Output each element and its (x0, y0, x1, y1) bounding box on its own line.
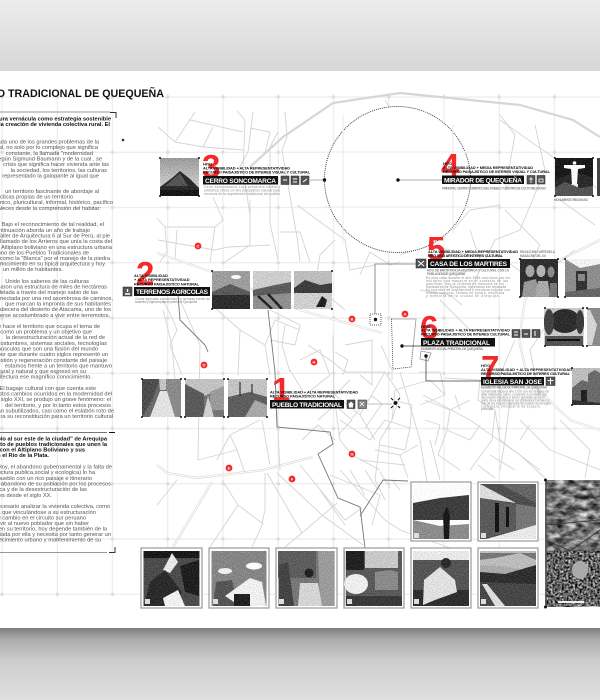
text panel: intro: la sociedad, los territorios, las culturas (11, 168, 107, 174)
photo H: path through fields (478, 548, 538, 608)
text panel: intro: como un problema y un objetivo que (0, 330, 92, 336)
photo: statue (555, 158, 593, 196)
photo corner markers (141, 157, 594, 418)
label 7: Iglesia San José: sillar tallados a mano, conserva su portada con (481, 392, 547, 396)
label 3: Cerro Soncomarca: Cerro sonconmarca cuya presencia visible y (204, 185, 280, 189)
label 5: Casa de los Mártires (416, 230, 556, 298)
label 6: Plaza Tradicional: ELEMENTO SOCIAL PRINCIPAL DE QUEQUEÑA (421, 346, 484, 351)
target marker (367, 398, 400, 408)
label 2: Terrenos Agrícolas: sustento y vigencia para el pueblo de Quequeña (135, 300, 197, 304)
map letter markers: C (197, 244, 200, 248)
label 4: Mirador de Quequeña: 4 (441, 147, 460, 184)
label 6: Plaza Tradicional: HITO (421, 324, 430, 329)
text panel: intro: siglo XXI, se produjo un grave fenómeno: el (1, 397, 111, 403)
label 1: Pueblo Tradicional: 1 (272, 371, 290, 408)
label 5: Casa de los Mártires: en una obra de arquitectura y escultura popular con (426, 288, 510, 292)
label 7: Iglesia San José: principal (481, 407, 493, 411)
label 6: Plaza Tradicional: RECURSO PAISAJISTICO DE INTERES CULTURAL (421, 332, 511, 337)
photo G: woman harvesting (411, 548, 471, 608)
text panel: intro: representado la galopante al igual que (2, 174, 99, 180)
text panel: intro: constante, la llamada "modernidad (6, 151, 93, 157)
text panel: intro: uno de los Pueblos Tradicionales de (0, 250, 89, 256)
street map (157, 93, 600, 555)
map letter markers: B (351, 316, 354, 322)
label 7: Iglesia San José: parte de la identidad de los pobladores locales y (481, 398, 549, 402)
label 2: Terrenos Agrícolas: 2 (136, 255, 154, 292)
map letter markers: E (228, 466, 231, 470)
label 7: Iglesia San José: ELEMENTO RELIGIOSO PRINCIPAL DE QUEQUEÑA (481, 385, 548, 390)
text panel: intro: El bagaje cultural con que cuenta este (0, 386, 96, 392)
label 5: Casa de los Mártires: HITO DE IMPORTANCIA HISTORICA Y CULTURAL CON LA (427, 268, 510, 272)
label 4: Mirador de Quequeña: RECURSO PAISAJISTICO DE INTERES VISUAL Y CULTURAL (443, 169, 551, 174)
plaza outline with connectors (370, 264, 481, 381)
label 1: Pueblo Tradicional: RECURSO PAISAJISTICO NATURAL (270, 394, 336, 398)
label 7: Iglesia San José: ALTA VISIBILIDAD + ALTA REPRESENTATIVIDAD (481, 367, 572, 372)
photo: volcano and fields (212, 271, 250, 309)
label 1: Pueblo Tradicional: ALTA VISIBILIDAD + ALTA REPRESENTATIVIDAD (270, 389, 358, 394)
photo: church (572, 368, 600, 405)
text panel: context: en su territorio, hoy depende también de la (0, 526, 108, 532)
label 3: Cerro Soncomarca: RECURSO PAISAJISTICO DE INTERES VISUAL Y CULTURAL (203, 170, 311, 175)
label 5: Casa de los Mártires: ALTA VISIBILIDAD + MEDIA REPRESENTATIVIDAD (428, 249, 518, 254)
label 5: Casa de los Mártires: guerrillas. Hoy la vivienda es memoria de los (426, 282, 504, 286)
photo: plaza detail (587, 308, 600, 346)
label 2: Terrenos Agrícolas: RECURSO PAISAJISTICO NATURAL (134, 282, 200, 286)
map letter markers: H (313, 360, 316, 364)
text panel: intro: costumbres, sistemas sociales, tecnologías (0, 341, 107, 347)
map letter markers: A (404, 312, 407, 316)
label 6: Plaza Tradicional (420, 309, 540, 351)
text panel: intro: Taller de Arquitectura 6 al Sur de Perú, al pie (0, 234, 110, 240)
label 5: Casa de los Mártires: trabajo comunal, tallado en piedra, escultura (426, 291, 504, 295)
label 5: Casa de los Mártires: militares una masacre en el contexto de las (426, 279, 508, 283)
map letter markers (195, 243, 408, 482)
text panel: context (0, 432, 115, 552)
photo: stone street (142, 379, 181, 417)
label 3: Cerro Soncomarca: recursos de la arquitectura tradicional del pueblo (204, 192, 280, 196)
label 3: Cerro Soncomarca: simbólica ofrece un hito paisajístico natural para (204, 188, 280, 192)
photo E: man on stone terrace (411, 482, 471, 541)
label 7: Iglesia San José (481, 349, 572, 411)
label 3: Cerro Soncomarca (202, 148, 311, 196)
text panel: intro: la desestructuración actual de la red de (6, 335, 105, 341)
label 4: Mirador de Quequeña: MONUMENTO RELIGIOSO (554, 198, 589, 202)
label 7: Iglesia San José: RECURSO PAISAJISTICO DE INTERES CULTURAL (481, 371, 571, 376)
label 2: Terrenos Agrícolas: TERRENOS AGRICOLAS (136, 289, 209, 296)
dotted viewshed circle (310, 106, 470, 252)
text panel: intro: estamos frente a un territorio que mantuvo (5, 364, 112, 370)
text panel: intro: Unido los saberes de las culturas (5, 279, 89, 285)
map dot (122, 139, 124, 141)
map letter markers: D (203, 362, 206, 368)
photo: hill (160, 158, 199, 196)
label 5: Casa de los Mártires: MASACRE DEL XX (520, 254, 547, 258)
label 7: Iglesia San José: cuya plaza principal le da espacio. (481, 404, 541, 408)
photo: sculpture (520, 259, 558, 297)
label 3: Cerro Soncomarca: HITO (203, 162, 212, 166)
photo: terraced field (253, 271, 291, 309)
label 7: Iglesia San José: 7 (481, 349, 499, 386)
label 3: Cerro Soncomarca: 3 (202, 148, 220, 185)
label 1: Pueblo Tradicional: PUEBLO TRADICIONAL (272, 402, 342, 409)
label 4: Mirador de Quequeña: PRINCIPAL CENTRO TURISTICO DEL PUEBLO Y CENTRO DE CULTO RELIGIOSO (442, 186, 547, 190)
label 6: Plaza Tradicional: 6 (420, 309, 438, 346)
photo: street houses (185, 379, 224, 417)
text panel: intro: como la "Blanca" por el manejo de la piedra (0, 256, 111, 262)
aerial photo of Quequeña (544, 478, 600, 608)
label 7: Iglesia San José: decoración mestiza y torres gemelas que son (481, 396, 545, 400)
photo: house door (565, 259, 600, 297)
photo A: man in hat (141, 548, 202, 608)
label 2: Terrenos Agrícolas: ALTA VISIBILIDAD (134, 273, 168, 278)
label 7: Iglesia San José: IGLESIA SAN JOSE (483, 379, 543, 386)
photo B: women with hats (209, 548, 269, 608)
text panel: intro: un territorio fascinante de abordaje al (5, 189, 99, 195)
text panel: intro: por que durante cuatro siglos representó un (0, 352, 108, 358)
label 5: Casa de los Mártires: CASA DE LOS MARTIRES (430, 261, 508, 268)
photo D: hat and gathering (344, 548, 404, 608)
photo: village wall (228, 379, 267, 417)
text panel: intro: un millón de habitantes. (3, 267, 63, 273)
label 5: Casa de los Mártires: ESCULTURA Y ARTE DE LA (520, 250, 556, 254)
text panel: context: Hoy, el abandono gubernamental y la falta de (0, 464, 112, 470)
text panel: intro: Bajo el reconocimiento de tal realidad, el (2, 222, 104, 228)
photo: plaza trees (544, 308, 584, 346)
label 7: Iglesia San José: Construida hacia el año 1720 con los bloques de (481, 390, 549, 394)
label 2: Terrenos Agrícolas: Zonas agrícolas construidas en terrazas fuente de (135, 297, 210, 301)
label 5: Casa de los Mártires: POBLACION DE QUEQUEÑA (427, 271, 466, 276)
text panel: intro: crisis que significa hacer vivienda ante las (3, 162, 109, 168)
label 5: Casa de los Mártires: pobladores de Quequeña, esperando ser reparada (426, 285, 506, 289)
photo: farmer on terrace (294, 271, 332, 309)
label 4: Mirador de Quequeña: MIRADOR DE QUEQUEÑA (444, 175, 522, 184)
text panel: intro: del territorio, y por lo tanto estos procesos (5, 403, 111, 409)
label 2: Terrenos Agrícolas (123, 255, 210, 304)
label 3: Cerro Soncomarca: ALTA VISIBILIDAD + ALTA REPRESENTATIVIDAD (203, 166, 290, 170)
label 3: Cerro Soncomarca: CERRO SONCOMARCA (205, 178, 276, 185)
label 6: Plaza Tradicional: PLAZA TRADICIONAL (423, 340, 490, 347)
text panel: intro: que marcan la impronta de sus habitantes (5, 302, 111, 308)
map letter markers: G (350, 452, 354, 456)
label 6: Plaza Tradicional: ALTA VISIBILIDAD + ALTA REPRESENTATIVIDAD (421, 328, 510, 332)
text panel: intro: veces desde la comprensión del habitar: (0, 206, 101, 212)
label 4: Mirador de Quequeña: ALTA VISIBILIDAD + MEDIA REPRESENTATIVIDAD (443, 165, 533, 170)
label 5: Casa de los Mártires: y memoria de la ciudad de Arequipa. (426, 294, 500, 298)
label 1: Pueblo Tradicional (270, 371, 366, 409)
label 2: Terrenos Agrícolas: + ALTA REPRESENTATIVIDAD (134, 277, 190, 282)
label 7: Iglesia San José: HITO (481, 363, 490, 368)
text panel: intro: llamado de los Arrieros que unía la costa del (0, 239, 112, 245)
text panel: intro: Altiplano boliviano en una estructura urbana (1, 245, 113, 251)
label 4: Mirador de Quequeña (441, 147, 589, 202)
label 5: Casa de los Mártires: 5 (427, 230, 445, 267)
text panel: intro (0, 112, 116, 420)
map letter markers: F (291, 476, 294, 482)
label 5: Casa de los Mártires: RECURSO ARTISTICO DE INTERES CULTURAL (428, 253, 504, 258)
label 5: Casa de los Mártires: En esta casa durante el año 1965 ocurrieron por los (426, 276, 510, 280)
reference grid (0, 94, 600, 597)
photo C: woman seated (276, 548, 337, 608)
label 4: Mirador de Quequeña: HITO (443, 161, 452, 166)
label 7: Iglesia San José: uno de los mejores ejemplos del pueblo de la región (481, 402, 551, 406)
photo F: stone houses (478, 482, 538, 541)
photo: statue detail (597, 158, 600, 196)
